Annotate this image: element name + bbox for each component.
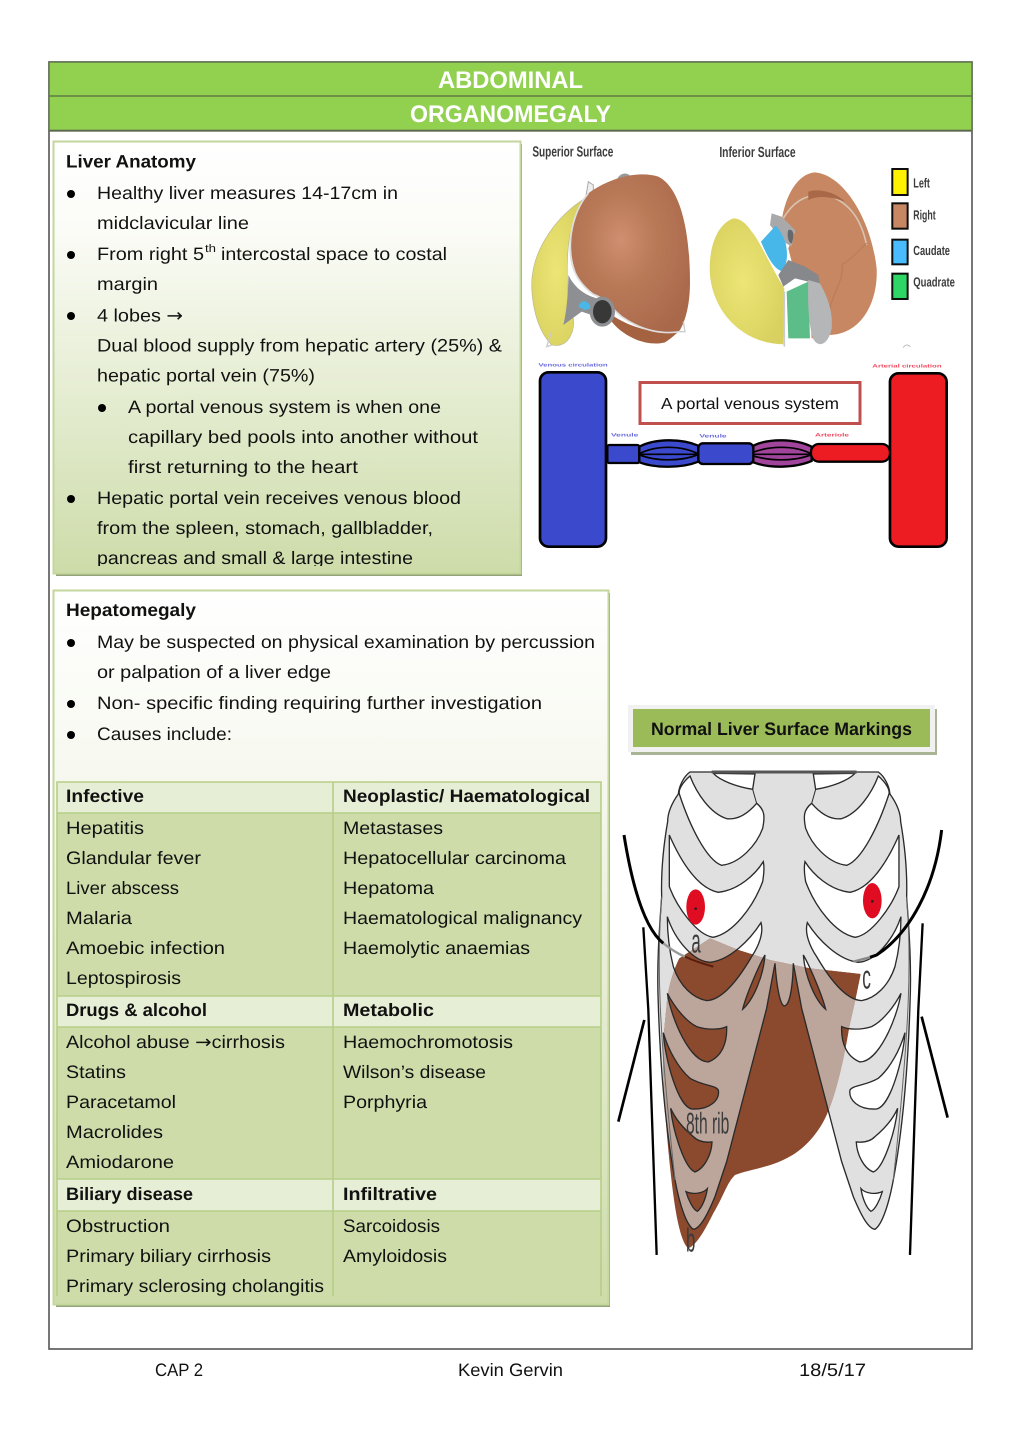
row: biliary and infiltrative: Sarcoidosis <box>343 1216 440 1236</box>
text block: liver anatomy bullets: Dual blood supply from hepatic artery (25%) & <box>97 336 502 356</box>
row: biliary and infiltrative: Biliary disease <box>66 1184 193 1204</box>
row: infective and neoplastic: Leptospirosis <box>66 968 181 988</box>
labels: vessels <box>538 362 942 439</box>
text block: hepatomegaly bullets <box>67 632 595 744</box>
row: drugs and metabolic: Wilson’s disease <box>343 1062 486 1082</box>
row: infective and neoplastic: Neoplastic/ Haematological <box>343 786 590 806</box>
ribcage <box>658 772 911 1229</box>
row: infective and neoplastic: Amoebic infection <box>66 938 225 958</box>
rib outlines <box>658 772 911 1229</box>
legend: liver lobes: Right <box>913 208 936 223</box>
legend: liver lobes: Quadrate <box>913 275 955 290</box>
vessel: arterial circulation <box>890 373 947 547</box>
title banner: ABDOMINAL <box>438 67 583 94</box>
row: drugs and metabolic: Haemochromotosis <box>343 1032 513 1052</box>
diagram: ribcage with liver surface markings <box>618 772 948 1260</box>
heading: hepatomegaly: Hepatomegaly <box>66 600 196 620</box>
footer: CAP 2 <box>155 1360 203 1380</box>
legend: liver lobes <box>892 169 955 299</box>
callout: a portal venous system <box>640 382 860 424</box>
title banner <box>49 62 972 131</box>
callout: a portal venous system: A portal venous system <box>661 396 839 413</box>
row: infective and neoplastic: Haemolytic anaemias <box>343 938 530 958</box>
row: biliary and infiltrative: Primary biliary cirrhosis <box>66 1246 271 1266</box>
text block: liver anatomy bullets: Hepatic portal vein receives venous blood <box>97 488 461 508</box>
row: infective and neoplastic: Haematological malignancy <box>343 908 582 928</box>
costal margin arcs <box>618 830 948 1255</box>
text block: hepatomegaly bullets: Non- specific finding requiring further investigation <box>97 693 542 713</box>
labels: vessels: Venous circulation <box>538 362 608 368</box>
text block: liver anatomy bullets: 4 lobes → <box>97 306 183 327</box>
row: drugs and metabolic: Porphyria <box>343 1092 428 1112</box>
row: infective and neoplastic: Infective <box>66 786 144 806</box>
liver overlay <box>663 938 861 1248</box>
text block: liver anatomy bullets: th <box>205 243 216 255</box>
row: infective and neoplastic: Glandular fever <box>66 848 201 868</box>
text block: hepatomegaly bullets: Causes include: <box>97 724 232 744</box>
row: drugs and metabolic <box>66 1000 513 1172</box>
label box: normal liver surface markings <box>628 705 937 755</box>
vessel: capillary beds and connecting vessels <box>607 440 890 467</box>
row: drugs and metabolic: Macrolides <box>66 1122 163 1142</box>
row: infective and neoplastic: Malaria <box>66 908 133 928</box>
row: biliary and infiltrative: Infiltrative <box>343 1184 437 1204</box>
row: drugs and metabolic: Amiodarone <box>66 1152 174 1172</box>
row: infective and neoplastic <box>66 786 590 988</box>
illustration: superior liver <box>532 174 690 347</box>
row: drugs and metabolic: Alcohol abuse →cirrhosis <box>66 1032 285 1053</box>
figure: liver lobes <box>532 143 955 348</box>
labels: vessels: Arterial circulation <box>872 363 942 369</box>
text block: liver anatomy bullets: hepatic portal vein (75%) <box>97 366 315 386</box>
panel: hepatomegaly <box>54 590 610 1307</box>
table: causes of hepatomegaly <box>57 782 601 1296</box>
row: infective and neoplastic: Metastases <box>343 818 443 838</box>
nipple markers <box>686 883 882 925</box>
labels: vessels: Venule <box>699 433 727 439</box>
text block: liver anatomy bullets: capillary bed pools into another without <box>128 427 478 447</box>
text block: liver anatomy bullets: Healthy liver measures 14-17cm in <box>97 183 398 203</box>
title banner: ORGANOMEGALY <box>410 101 611 128</box>
text block: liver anatomy bullets: intercostal space to costal <box>221 244 447 264</box>
panel: liver anatomy <box>54 142 522 576</box>
vessel: venous circulation <box>540 372 606 547</box>
row: drugs and metabolic: Metabolic <box>343 1000 434 1020</box>
text block: hepatomegaly bullets: May be suspected on physical examination by percussion <box>97 632 595 652</box>
row: infective and neoplastic: Hepatocellular carcinoma <box>343 848 567 868</box>
footer: 18/5/17 <box>799 1360 866 1380</box>
labels: vessels: Arteriole <box>815 432 849 438</box>
marker labels: 8th rib <box>686 1107 729 1140</box>
text block: liver anatomy bullets: margin <box>97 274 158 294</box>
row: infective and neoplastic: Hepatoma <box>343 878 435 898</box>
marker labels: c <box>862 958 871 996</box>
heading: inferior surface: Inferior Surface <box>719 144 796 160</box>
row: drugs and metabolic: Statins <box>66 1062 126 1082</box>
labels: vessels: Venule <box>611 432 638 438</box>
text block: hepatomegaly bullets: or palpation of a liver edge <box>97 662 331 682</box>
marker labels: b <box>686 1222 695 1259</box>
row: infective and neoplastic: Liver abscess <box>66 878 179 898</box>
text block: liver anatomy bullets: from the spleen, stomach, gallbladder, <box>97 518 433 538</box>
marker labels <box>686 923 871 1259</box>
illustration: inferior liver <box>710 172 877 347</box>
text block: liver anatomy bullets: From right 5 <box>97 244 204 264</box>
legend: liver lobes: Caudate <box>913 243 950 258</box>
row: biliary and infiltrative: Obstruction <box>66 1216 170 1236</box>
label box: normal liver surface markings: Normal Liver Surface Markings <box>651 719 912 739</box>
text block: liver anatomy bullets: midclavicular line <box>97 213 249 233</box>
text block: liver anatomy bullets: pancreas and small & large intestine <box>97 548 413 568</box>
heading: superior surface: Superior Surface <box>532 143 613 160</box>
footer <box>155 1360 866 1380</box>
heading: liver anatomy: Liver Anatomy <box>66 152 196 172</box>
diagram: portal venous circulation <box>538 362 947 547</box>
text block: liver anatomy bullets: first returning to the heart <box>128 457 358 477</box>
text block: liver anatomy bullets: A portal venous system is when one <box>128 397 441 417</box>
row: biliary and infiltrative: Amyloidosis <box>343 1246 447 1266</box>
legend: liver lobes: Left <box>913 176 930 191</box>
row: biliary and infiltrative <box>66 1184 447 1296</box>
footer: Kevin Gervin <box>458 1360 563 1380</box>
clavicle bar <box>712 767 857 776</box>
row: drugs and metabolic: Paracetamol <box>66 1092 176 1112</box>
text block: liver anatomy bullets <box>67 183 502 568</box>
row: biliary and infiltrative: Primary sclerosing cholangitis <box>66 1276 324 1296</box>
row: infective and neoplastic: Hepatitis <box>66 818 144 838</box>
marker labels: a <box>691 923 701 960</box>
row: drugs and metabolic: Drugs & alcohol <box>66 1000 207 1020</box>
